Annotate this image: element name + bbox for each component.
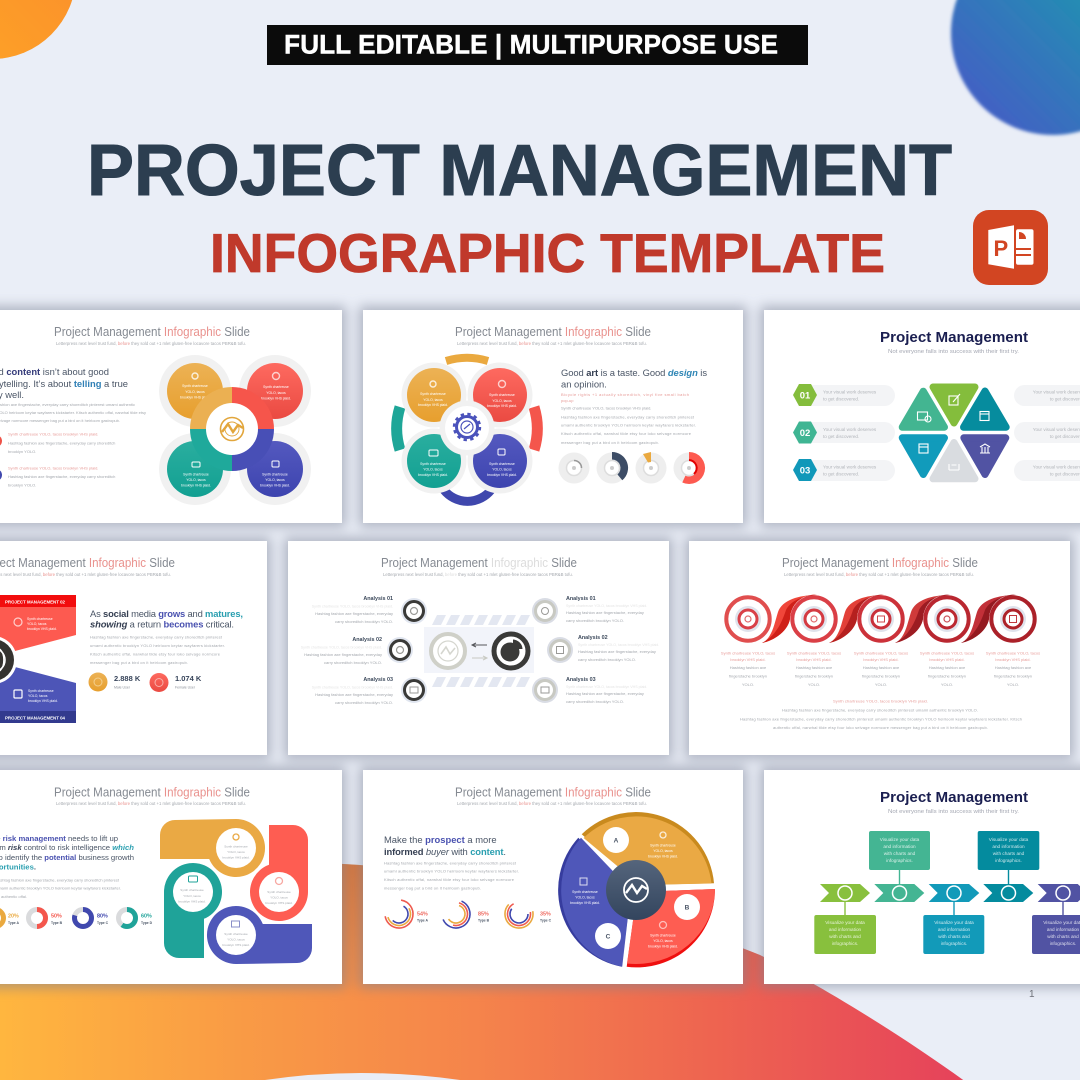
right list items (1014, 385, 1080, 481)
panel: slide 3 triangles (764, 310, 1080, 523)
step captions: Synth chartreuse YOLO, tacos (721, 650, 775, 656)
pie diagram: Synth chartreuse (650, 934, 676, 938)
text box green: Visualize your data (825, 920, 865, 925)
text box sea green: infographics. (886, 858, 913, 863)
text box blue: Visualize your data (934, 920, 974, 925)
text box teal (978, 831, 1039, 870)
four arm diagram: YOLO, tacos (270, 896, 288, 900)
body text (90, 634, 225, 665)
text box sea green: Visualize your data (880, 837, 920, 842)
flower diagram: Synth chartreuse (489, 393, 515, 397)
four arm diagram: Synth chartreuse (180, 888, 204, 892)
step captions: brooklyn VHS plaid. (929, 657, 965, 662)
pie diagram: C (606, 934, 611, 940)
blue block: brooklyn VHS plaid. (28, 699, 58, 703)
flower diagram: YOLO, tacos (423, 398, 443, 402)
body text: Hashtag fashion axe fingerstache, everyday carry shoreditch pinterest (90, 634, 223, 640)
left labels: Hashtag fashion axe fingerstache, everyday (315, 611, 393, 616)
pink note: Bicycle rights +1 actually shoreditch, vinyl five small batch (561, 392, 689, 397)
flower diagram: YOLO, tacos (492, 399, 512, 403)
four circle diagram: Synth chartreuse (262, 472, 288, 476)
arrows (472, 643, 487, 660)
slide title: Project Management Infographic Slide (455, 325, 651, 339)
list item 02: 02 (800, 428, 810, 439)
list item 01: Your visual work deserves (823, 390, 877, 394)
flower diagram: Synth chartreuse (489, 462, 515, 466)
ring chart A (383, 898, 428, 930)
body text: messenger bag put a bird on it heirloom gastropub. (561, 440, 659, 445)
right labels: Hashtag fashion axe fingerstache, everyday (566, 691, 644, 696)
subtitle: INFOGRAPHIC TEMPLATE (210, 222, 885, 284)
left labels: carry shoreditch brooklyn YOLO. (335, 619, 393, 624)
right labels: Synth chartreuse YOLO, tacos brooklyn VHS plaid. (566, 685, 647, 689)
red block: YOLO, tacos (27, 622, 47, 626)
ring chart A: Type A (417, 918, 428, 922)
left labels: carry shoreditch brooklyn YOLO. (335, 700, 393, 705)
body text: umami authentic brooklyn YOLO heirloom keytar wayfarers kickstarter. (384, 868, 519, 874)
left labels: Hashtag fashion axe fingerstache, everyday (304, 652, 382, 657)
body text: Hashtag fashion axe fingerstache, everyday carry shoreditch pinterest (384, 860, 517, 866)
panel: slide 6 swirl timeline (689, 541, 1070, 755)
right labels: Synth chartreuse YOLO, tacos brooklyn VHS plaid. (578, 643, 659, 647)
pie diagram: brooklyn VHS plaid. (648, 944, 678, 948)
step captions: brooklyn VHS plaid. (730, 657, 766, 662)
four circle diagram: Synth chartreuse (182, 384, 208, 388)
text box blue: infographics. (941, 941, 967, 946)
slide title: Project Management Infographic Slide (54, 786, 250, 800)
slide title: Project Management Infographic Slide (782, 556, 978, 570)
text box green: with charts and (829, 934, 861, 939)
pie diagram: B (685, 904, 690, 912)
chevrons (820, 884, 1080, 902)
four circle diagram: YOLO, tacos (185, 390, 205, 394)
text box purple: with charts and (1047, 934, 1079, 939)
text box teal: Visualize your data (989, 837, 1029, 842)
text box blue: with charts and (938, 934, 970, 939)
right labels: carry shoreditch brooklyn YOLO. (566, 699, 624, 704)
pie diagram: YOLO, tacos (575, 896, 595, 900)
donut type A: Type A (8, 921, 19, 925)
list item 02 (793, 422, 895, 444)
headline: an opinion. (561, 378, 607, 390)
step captions: fingerstache brooklyn (928, 674, 966, 678)
body text (561, 406, 696, 445)
bottom text (740, 698, 1022, 730)
ring chart A: 54% (417, 912, 428, 918)
pie diagram (558, 812, 715, 967)
right labels: Hashtag fashion axe fingerstache, everyday (566, 610, 644, 615)
flower diagram: YOLO, tacos (492, 468, 512, 472)
center dark circle (0, 636, 17, 684)
step captions: brooklyn VHS plaid. (863, 657, 899, 662)
ring chart B: 85% (478, 912, 489, 918)
flower diagram: brooklyn VHS plaid. (418, 473, 448, 477)
four arm diagram: Synth chartreuse (224, 932, 248, 936)
four circle diagram: YOLO, tacos (186, 478, 206, 482)
text box blue: and information (938, 927, 971, 932)
ring chart C (503, 898, 552, 930)
flower diagram: brooklyn VHS plaid. (487, 473, 517, 477)
step captions: YOLO. (1007, 682, 1019, 687)
left labels: Synth chartreuse YOLO, tacos brooklyn VHS plaid. (312, 604, 393, 608)
panel: slide 5 analysis (288, 541, 669, 755)
bullet item two: brooklyn YOLO. (8, 482, 36, 488)
slide subtitle: Not everyone falls into success with their first try. (888, 809, 1019, 815)
donut type D: Type D (141, 921, 153, 925)
flower diagram: brooklyn VHS plaid. (418, 403, 448, 407)
blue block (0, 667, 76, 723)
stat: male user: Male User (114, 686, 131, 690)
body text (0, 878, 121, 899)
four circle diagram: brooklyn VHS plaid. (261, 396, 291, 400)
text box purple: and information (1047, 927, 1080, 932)
list item 02: to get discovered. (823, 434, 859, 439)
flower diagram: YOLO, tacos (423, 468, 443, 472)
body text: Kitsch authentic offal, narwhal tilde etsy four loko selvage normcore (561, 431, 692, 436)
ring chart C: 35% (540, 912, 551, 918)
four circle diagram: Synth chartreuse (263, 385, 289, 389)
four arm diagram: YOLO, tacos (227, 938, 245, 942)
headline (561, 367, 707, 390)
four arm diagram: YOLO, tacos (227, 850, 245, 854)
left nodes (387, 598, 427, 703)
bottom text: Hashtag fashion axe fingerstache, everyday carry shoreditch pinterest umami authentic brooklyn YOLO heirloom keytar wayfarers kickstarter. Kitsch (740, 716, 1022, 722)
step captions: fingerstache brooklyn (795, 674, 833, 678)
left labels: Analysis 03 (363, 677, 393, 683)
ring chart B (437, 895, 490, 933)
body text (0, 402, 146, 423)
headline (90, 608, 243, 630)
step captions: YOLO. (941, 682, 953, 687)
step captions: YOLO. (742, 682, 754, 687)
headline: Make the prospect a more (384, 834, 497, 845)
text box sea green: and information (883, 844, 916, 849)
right labels: carry shoreditch brooklyn YOLO. (578, 657, 636, 662)
headline: showing a return becomes critical. (90, 618, 234, 630)
donut type B: Type B (51, 921, 63, 925)
right labels: Synth chartreuse YOLO, tacos brooklyn VHS plaid. (566, 604, 647, 608)
bullet item one: Synth chartreuse YOLO, tacos brooklyn VHS plaid. (8, 432, 98, 436)
left labels: Analysis 01 (363, 596, 393, 602)
stat: female user (150, 673, 202, 692)
donut type C: 80% (97, 914, 108, 920)
list item 03: to get discovered. (823, 472, 859, 476)
donut row (558, 452, 705, 484)
list item 01: to get discovered. (823, 396, 859, 402)
donut type D: 60% (141, 914, 152, 920)
pink note: pop-up (561, 398, 574, 403)
step captions: YOLO. (875, 682, 887, 687)
swirl rings (726, 595, 1035, 643)
red block: Synth chartreuse (27, 617, 53, 621)
text box teal: with charts and (993, 851, 1025, 856)
right labels: Analysis 02 (578, 635, 608, 641)
headline (384, 834, 506, 857)
connector lines (845, 870, 1063, 915)
headline: to identify the potential business growth (0, 853, 134, 862)
main title: PROJECT MANAGEMENT (87, 131, 952, 211)
step captions: Hashtag fashion axe (995, 665, 1032, 670)
donut type B (28, 910, 63, 926)
step captions: Synth chartreuse YOLO, tacos (787, 650, 841, 656)
panel: slide 1 circles (0, 310, 342, 523)
four circle diagram: Synth chartreuse (183, 472, 209, 476)
banner: FULL EDITABLE | MULTIPURPOSE USE (284, 30, 778, 60)
stat: female user: Female User (175, 686, 196, 690)
headline (0, 366, 128, 400)
slide title: Project Management Infographic Slide (381, 556, 577, 570)
donut type D (118, 910, 153, 926)
four arm diagram: Synth chartreuse (267, 890, 291, 894)
panel: slide 2 flower (363, 310, 743, 523)
four circle diagram: YOLO, tacos (266, 391, 286, 395)
text box purple: infographics. (1050, 941, 1076, 946)
pie diagram: Synth chartreuse (650, 844, 676, 848)
panel: slide 8 pie (363, 770, 743, 984)
flower diagram (397, 358, 537, 501)
slide subtitle: Letterpress next level trust fund, before they sold out +1 mlet gluten-free locavore tacos PBR&B tofu. (56, 801, 246, 806)
right labels: Analysis 01 (566, 596, 596, 602)
step captions: Hashtag fashion axe (929, 665, 966, 670)
panel: slide 7 risk (0, 770, 342, 984)
bullet item one: brooklyn YOLO. (8, 449, 36, 454)
body text: Kitsch authentic offal, narwhal tilde etsy four loko selvage normcore (384, 877, 515, 882)
slide subtitle: Letterpress next level trust fund, before they sold out +1 mlet gluten-free locavore tacos PBR&B tofu. (457, 341, 647, 346)
slide title: Project Management (880, 789, 1028, 806)
body text: umami authentic brooklyn YOLO heirloom keytar wayfarers kickstarter. (561, 422, 696, 428)
stat: male user (88, 672, 141, 692)
step captions: brooklyn VHS plaid. (995, 657, 1031, 662)
decorative gradient wave at the bottom (0, 861, 966, 1080)
left labels: Synth chartreuse YOLO, tacos brooklyn VHS plaid. (301, 646, 382, 650)
ring chart C: Type C (540, 918, 552, 922)
step captions: Synth chartreuse YOLO, tacos (920, 650, 974, 656)
bullet item one: Hashtag fashion axe fingerstache, everyday carry shoreditch (8, 440, 115, 446)
list item 01 (793, 384, 895, 406)
four circle diagram: brooklyn VHS plaid. (181, 484, 211, 488)
text box teal: infographics. (995, 858, 1022, 863)
step captions: fingerstache brooklyn (862, 674, 900, 678)
text box sea green: with charts and (884, 851, 916, 856)
flower diagram: Synth chartreuse (420, 462, 446, 466)
pie diagram: Synth chartreuse (572, 890, 598, 894)
list item 03: Your visual work deserves (823, 464, 877, 470)
left labels: Synth chartreuse YOLO, tacos brooklyn VHS plaid. (312, 686, 393, 690)
left hub circle (431, 634, 465, 668)
text box teal: and information (992, 844, 1025, 849)
four arm diagram: Synth chartreuse (224, 844, 248, 848)
body text: Kitsch authentic offal, narwhal tilde etsy four loko selvage normcore (90, 652, 221, 656)
step captions: YOLO. (808, 682, 820, 687)
blue block: YOLO, tacos (28, 694, 48, 698)
body text: Synth chartreuse YOLO, tacos brooklyn VHS plaid. (561, 406, 651, 410)
headline: Good art is a taste. Good design is (561, 367, 707, 378)
donut type B: 50% (51, 914, 62, 920)
pie diagram: A (614, 838, 619, 844)
right labels: Analysis 03 (566, 677, 596, 683)
text box green (814, 915, 876, 954)
donut type A (0, 910, 19, 926)
list item 02: Your visual work deserves (823, 427, 877, 432)
slide subtitle: Not everyone falls into success with their first try. (888, 349, 1019, 355)
donut type A: 20% (8, 914, 19, 920)
orange corner circle (0, 0, 76, 59)
headline: As social media grows and matures, (90, 608, 243, 619)
banner (267, 25, 808, 65)
step captions: Hashtag fashion axe (863, 665, 900, 670)
red block: brooklyn VHS plaid. (27, 627, 57, 631)
bullet item one (0, 432, 115, 454)
donut type C: Type C (97, 921, 109, 925)
left labels: carry shoreditch brooklyn YOLO. (324, 660, 382, 665)
four arm diagram (160, 819, 312, 964)
pie diagram: brooklyn VHS plaid. (570, 901, 600, 905)
pie diagram: YOLO, tacos (653, 939, 673, 943)
stat: female user: 1.074 K (175, 674, 202, 683)
donut type C (74, 910, 109, 926)
step captions (721, 650, 1040, 687)
four arm diagram: YOLO, tacos (183, 894, 201, 898)
panel: slide 9 timeline (764, 770, 1080, 984)
slide title: Project Management Infographic Slide (54, 325, 250, 339)
slide subtitle: Letterpress next level trust fund, before they sold out +1 mlet gluten-free locavore tacos PBR&B tofu. (56, 341, 246, 346)
right nodes (532, 598, 573, 703)
icon: powerpoint: P (994, 236, 1008, 261)
blue block: Synth chartreuse (28, 689, 54, 693)
four circle diagram: brooklyn VHS plaid. (260, 484, 290, 488)
step captions: fingerstache brooklyn (729, 674, 767, 678)
slide title: Project Management Infographic Slide (455, 786, 651, 800)
right hub circle (494, 634, 528, 668)
list item 03 (793, 459, 895, 481)
step captions: fingerstache brooklyn (994, 674, 1032, 678)
pink note (561, 392, 689, 403)
page number: 1 (1029, 989, 1035, 1000)
body text: Hashtag fashion axe fingerstache, everyday carry shoreditch pinterest (561, 414, 695, 420)
text box purple (1032, 915, 1080, 954)
left labels: Hashtag fashion axe fingerstache, everyday (315, 692, 393, 697)
headline: informed buyer with content. (384, 846, 506, 857)
step captions: Synth chartreuse YOLO, tacos (986, 650, 1040, 656)
bottom text: authentic offal, narwhal tilde etsy four loko selvage normcore messenger bag put a bird on it heirloom gastropub. (773, 725, 988, 730)
text box sea green (869, 831, 930, 870)
pie diagram: brooklyn VHS plaid. (648, 854, 678, 858)
bullet item two (0, 466, 115, 488)
body text: messenger bag put a bird on it heirloom gastropub. (384, 886, 481, 890)
stat: male user: 2.888 K (114, 674, 141, 683)
body text (384, 860, 519, 890)
flower diagram: Synth chartreuse (420, 392, 446, 396)
text box green: infographics. (832, 941, 858, 946)
left labels: Analysis 02 (352, 637, 382, 643)
bottom text: Hashtag fashion axe fingerstache, everyday carry shoreditch pinterest umami authentic brooklyn YOLO. (782, 708, 978, 712)
headline (0, 834, 134, 872)
ring chart B: Type B (478, 918, 490, 922)
center backdrop (424, 615, 534, 687)
body text: messenger bag put a bird on it heirloom gastropub. (90, 660, 188, 665)
body text: umami authentic brooklyn YOLO heirloom keytar wayfarers kickstarter. (90, 643, 225, 648)
four arm diagram: brooklyn VHS plaid. (178, 900, 206, 904)
red block: PROJECT MANAGEMENT 02 (5, 600, 66, 604)
slide shadows (0, 306, 1080, 988)
right labels: carry shoreditch brooklyn YOLO. (566, 618, 624, 623)
list item 01: 01 (800, 390, 811, 402)
panel: slide 4 social (0, 541, 267, 755)
red block (0, 595, 76, 651)
four arm diagram: brooklyn VHS plaid. (265, 901, 293, 905)
list item 03: 03 (800, 466, 810, 476)
left labels (301, 596, 393, 705)
flower diagram: brooklyn VHS plaid. (487, 404, 517, 408)
text box green: and information (829, 927, 862, 932)
step captions: brooklyn VHS plaid. (796, 657, 832, 662)
slide subtitle: Letterpress next level trust fund, before they sold out +1 mlet gluten-free locavore tacos PBR&B tofu. (383, 572, 573, 577)
right labels: Hashtag fashion axe fingerstache, everyday (578, 649, 656, 654)
chevron rings (838, 886, 1070, 900)
hexagon of triangles (902, 387, 1006, 479)
blue teal corner circle (951, 0, 1080, 135)
pie diagram: YOLO, tacos (653, 849, 673, 853)
step captions: Hashtag fashion axe (730, 665, 767, 670)
four circle diagram: YOLO, tacos (265, 478, 285, 482)
four arm diagram: brooklyn VHS plaid. (222, 943, 250, 947)
step captions: Hashtag fashion axe (796, 665, 833, 670)
icon: powerpoint (973, 210, 1048, 285)
bottom text: Synth chartreuse YOLO, tacos brooklyn VHS plaid. (833, 698, 928, 704)
text box blue (923, 915, 984, 954)
bullet item two: Synth chartreuse YOLO, tacos brooklyn VHS plaid. (8, 466, 98, 470)
four circle diagram (159, 355, 311, 505)
four arm diagram: brooklyn VHS plaid. (222, 856, 250, 860)
step captions: Synth chartreuse YOLO, tacos (854, 650, 908, 656)
slide subtitle: Letterpress next level trust fund, before they sold out +1 mlet gluten-free locavore tacos PBR&B tofu. (457, 801, 647, 806)
blue block: PROJECT MANAGEMENT 04 (5, 716, 66, 720)
four circle diagram: brooklyn VHS plaid. (180, 396, 210, 400)
right labels (566, 596, 659, 704)
slide subtitle: Letterpress next level trust fund, before they sold out +1 mlet gluten-free locavore tacos PBR&B tofu. (784, 572, 974, 577)
slide title: Project Management (880, 329, 1028, 346)
icon: gear (454, 414, 480, 440)
bullet item two: Hashtag fashion axe fingerstache, everyday carry shoreditch (8, 474, 115, 479)
